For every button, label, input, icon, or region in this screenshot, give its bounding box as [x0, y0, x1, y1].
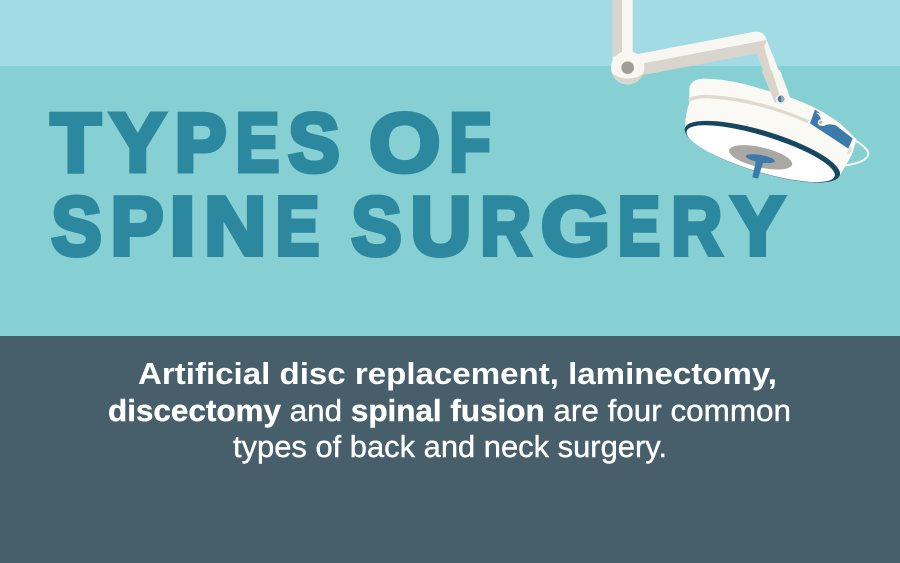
- vertical arm: [613, 0, 633, 62]
- title: T: [51, 96, 101, 189]
- title: U: [410, 180, 471, 272]
- title: I: [169, 180, 196, 272]
- title: S: [288, 96, 340, 189]
- body seam: [689, 97, 808, 122]
- title: S: [351, 180, 402, 272]
- upper arm: [633, 32, 767, 65]
- handle loop: [843, 141, 868, 166]
- intro text: discectomy and spinal fusion are four common: [108, 393, 791, 428]
- title: F: [449, 96, 491, 189]
- intro text: types of back and neck surgery.: [233, 429, 667, 464]
- title: O: [369, 96, 440, 189]
- title: R: [480, 180, 531, 272]
- title: Y: [110, 96, 166, 189]
- icon: surgical lamp: [611, 0, 868, 195]
- pivot: [776, 94, 786, 104]
- title: S: [51, 180, 102, 272]
- intro text: Artificial disc replacement, laminectomy,: [138, 356, 777, 391]
- title: E: [618, 180, 660, 272]
- title: E: [276, 180, 319, 272]
- lamp face: [679, 108, 846, 195]
- intro text: [108, 356, 791, 464]
- title: E: [236, 96, 279, 189]
- lamp body: [685, 79, 857, 177]
- title: [51, 96, 785, 272]
- support arm end: [762, 70, 790, 103]
- lens handle: [745, 153, 775, 179]
- title: R: [671, 180, 722, 272]
- title: Y: [731, 180, 785, 272]
- title: G: [541, 180, 610, 272]
- control panel: [810, 109, 853, 149]
- lower arm: [757, 40, 788, 105]
- lens: [727, 140, 794, 174]
- title: P: [111, 180, 163, 272]
- joint: [611, 51, 644, 84]
- title: N: [204, 180, 266, 272]
- title: P: [175, 96, 226, 189]
